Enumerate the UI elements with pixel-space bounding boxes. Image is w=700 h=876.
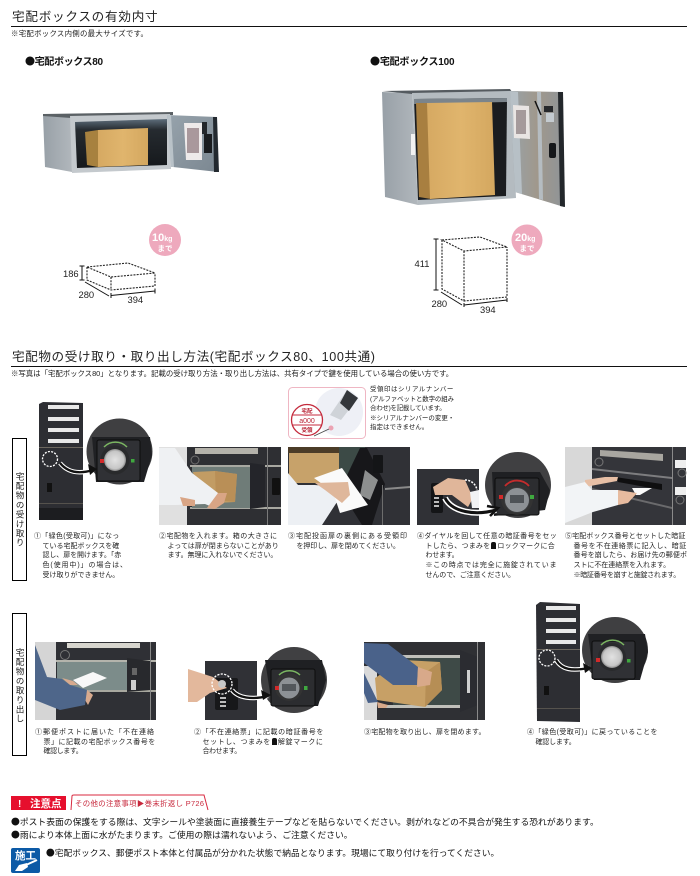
photo: setting keypad dial	[188, 661, 257, 720]
warning label: notes: 注意点	[30, 797, 62, 810]
stamp note text: 指定はできません。	[370, 424, 428, 431]
caption: receive step 4: せんので、ご注意ください。	[426, 572, 515, 579]
caption: retrieve step 4	[527, 728, 658, 746]
side label: retrieving parcels: 宅配物の取り出し	[15, 648, 25, 724]
note list: ●雨により本体上面に水がたまります。ご使用の際は濡れないよう、ご注意ください。	[11, 828, 353, 840]
side label: retrieving parcels	[12, 613, 27, 756]
stamp note text: 合わせ)を記載しています。	[370, 405, 445, 412]
caption: receive step 1: ①「緑色(受取可)」になっ	[34, 533, 120, 540]
icon: dial magnified, retrieve step 2	[261, 647, 327, 713]
caption: retrieve step 1: 票」に記載の宅配ボックス番号を	[44, 739, 156, 746]
photo: posting the slip into the mailbox	[565, 447, 686, 525]
caption: receive step 4	[417, 532, 557, 579]
note: photo reference: ※写真は「宅配ボックス80」となります。記載の受け取り方法・取り出し方法は、共有タイプで鍵を使用している場合の使い方です。	[11, 369, 453, 378]
caption: retrieve step 1: 確認します。	[44, 748, 82, 755]
caption: receive step 3: を押印し、扉を閉めてください。	[296, 543, 400, 550]
label: box 100: ●宅配ボックス100	[370, 53, 454, 68]
caption: retrieve step 1: ①郵便ポストに届いた「不在連絡	[35, 729, 155, 736]
caption: receive step 5: 番号を崩したら、お届け先の郵便ポ	[574, 552, 687, 559]
stamp panel: serial number stamp	[288, 388, 366, 438]
side label: receiving parcels: 宅配物の受け取り	[15, 472, 25, 548]
warning label: notes	[11, 796, 66, 810]
photo: removing parcel	[364, 642, 485, 720]
icon: dial magnified, green state, retrieve step 4	[582, 617, 648, 683]
arrow: hand to dial, receive step 4	[445, 498, 498, 516]
diagram: box 100 dimensions 411 x 280 x 394	[414, 237, 507, 315]
caption: receive step 2: ②宅配物を入れます。箱の大きさに	[159, 533, 278, 540]
photo: stamping slip inside the door	[288, 447, 410, 525]
caption: retrieve step 2: 合わせます。	[202, 748, 241, 755]
badge: 10kg max: まで	[157, 244, 173, 253]
caption: receive step 1: 認し、扉を開けます。「赤	[42, 552, 121, 559]
caption: receive step 1: ている宅配ボックスを確	[42, 543, 119, 550]
label: box 80: ●宅配ボックス80	[25, 53, 103, 68]
badge: 10kg max: 10kg	[152, 232, 172, 244]
caption: receive step 5: ⑤宅配ボックス番号とセットした暗証	[565, 533, 686, 540]
caption: retrieve step 3: ③宅配物を取り出し、扉を閉めます。	[364, 729, 486, 736]
photo: putting parcel in box	[159, 447, 281, 525]
caption: receive step 3	[288, 532, 408, 550]
icon: construction trowel	[11, 848, 40, 873]
stamp panel: serial number stamp: a000	[299, 418, 315, 425]
arrow: locker to dial, retrieve step 4	[556, 660, 592, 673]
icon: dial magnified, green state	[86, 418, 152, 484]
caption: receive step 3: ③宅配投函扉の裏側にある受領印	[288, 533, 408, 540]
photo: locker unit, retrieve step 4	[536, 602, 580, 722]
photo: delivery box 80	[43, 112, 219, 173]
diagram: box 100 dimensions 411 x 280 x 394: 394	[480, 304, 496, 315]
badge: 20kg max	[512, 224, 542, 256]
arrow: keypad to dial, retrieve step 2	[232, 690, 271, 700]
caption: receive step 1: 色(使用中)」の場合は、	[42, 562, 128, 569]
note list	[11, 815, 599, 840]
caption: receive step 5	[565, 532, 687, 579]
diagram: box 100 dimensions 411 x 280 x 394: 411	[414, 258, 429, 269]
stamp panel: serial number stamp: 受領	[301, 426, 313, 434]
caption: receive step 4: わせます。	[426, 552, 458, 559]
tab: see other notes page reference: その他の注意事項▶巻末折返し P726	[75, 799, 204, 808]
caption: retrieve step 2: セットし、つまみを 解錠マークに	[202, 739, 324, 746]
stamp note text: (アルファベットと数字の組み	[370, 396, 454, 403]
caption: retrieve step 4: 確認します。	[536, 739, 576, 746]
installation note: ●宅配ボックス、郵便ポスト本体と付属品が分かれた状態で納品となります。現場にて取り付けを行ってください。	[46, 846, 499, 859]
stamp note text: ※シリアルナンバーの変更・	[370, 415, 454, 422]
caption: receive step 2	[159, 532, 279, 559]
photo: checking slip at mailbox	[35, 642, 156, 720]
caption: receive step 1: 受け取りができません。	[42, 572, 119, 579]
caption: receive step 4: ※この時点では完全に施錠されていま	[426, 562, 557, 569]
section heading: how to receive and retrieve: 宅配物の受け取り・取り出し方法(宅配ボックス80、100共通)	[12, 350, 376, 364]
caption: receive step 1	[34, 532, 128, 579]
stamp panel: serial number stamp: 宅配	[301, 407, 313, 415]
caption: retrieve step 4: ④「緑色(受取可)」に戻っていることを	[527, 729, 658, 736]
note list: ●ポスト表面の保護をする際は、文字シールや塗装面に直接養生テープなどを貼らないでください。剥がれなどの不具合が発生する恐れがあります。	[11, 815, 599, 828]
arrow: locker to dial, receive step 1	[60, 463, 97, 475]
note: max inner size: ※宅配ボックス内側の最大サイズです。	[11, 29, 148, 38]
stamp note text: 受領印はシリアルナンバー	[370, 386, 454, 393]
icon: dial magnified, red state	[485, 452, 551, 518]
diagram: box 80 dimensions 186 x 280 x 394: 186	[63, 268, 79, 279]
diagram: box 80 dimensions 186 x 280 x 394	[63, 263, 155, 305]
photo: turning the dial	[417, 469, 479, 525]
photo: locker unit, receive step 1	[39, 402, 83, 520]
caption: retrieve step 1	[35, 728, 156, 755]
caption: receive step 5: ※暗証番号を崩すと施錠されます。	[574, 572, 680, 579]
diagram: box 100 dimensions 411 x 280 x 394: 280	[432, 298, 447, 309]
stamp note text	[370, 386, 454, 431]
caption: retrieve step 2	[194, 728, 324, 755]
tab: see other notes page reference	[71, 795, 208, 810]
section heading: effective inner size: 宅配ボックスの有効内寸	[12, 10, 158, 24]
caption: receive step 4: ④ダイヤルを回して任意の暗証番号をセッ	[417, 533, 557, 540]
caption: retrieve step 2: ②「不在連絡票」に記載の暗証番号を	[194, 729, 324, 736]
badge: 20kg max: 20kg	[515, 232, 535, 244]
diagram: box 80 dimensions 186 x 280 x 394: 280	[78, 289, 94, 300]
caption: receive step 5: ストに不在連絡票を入れます。	[574, 562, 670, 569]
badge: 20kg max: まで	[519, 244, 535, 253]
photo: delivery box 100	[382, 89, 565, 207]
caption: receive step 2: ます。無理に入れないでください。	[168, 552, 277, 559]
diagram: box 80 dimensions 186 x 280 x 394: 394	[128, 294, 143, 305]
icon: construction trowel: 施工	[15, 849, 36, 862]
caption: receive step 2: よっては扉が閉まらないことがあり	[168, 543, 279, 550]
side label: receiving parcels	[12, 438, 27, 581]
caption: receive step 5: 番号を不在連絡票に記入し、暗証	[574, 543, 687, 550]
warning label: notes: !	[18, 799, 21, 810]
badge: 10kg max	[149, 224, 181, 256]
caption: receive step 4: トしたら、つまみを ロックマークに合	[426, 543, 555, 550]
